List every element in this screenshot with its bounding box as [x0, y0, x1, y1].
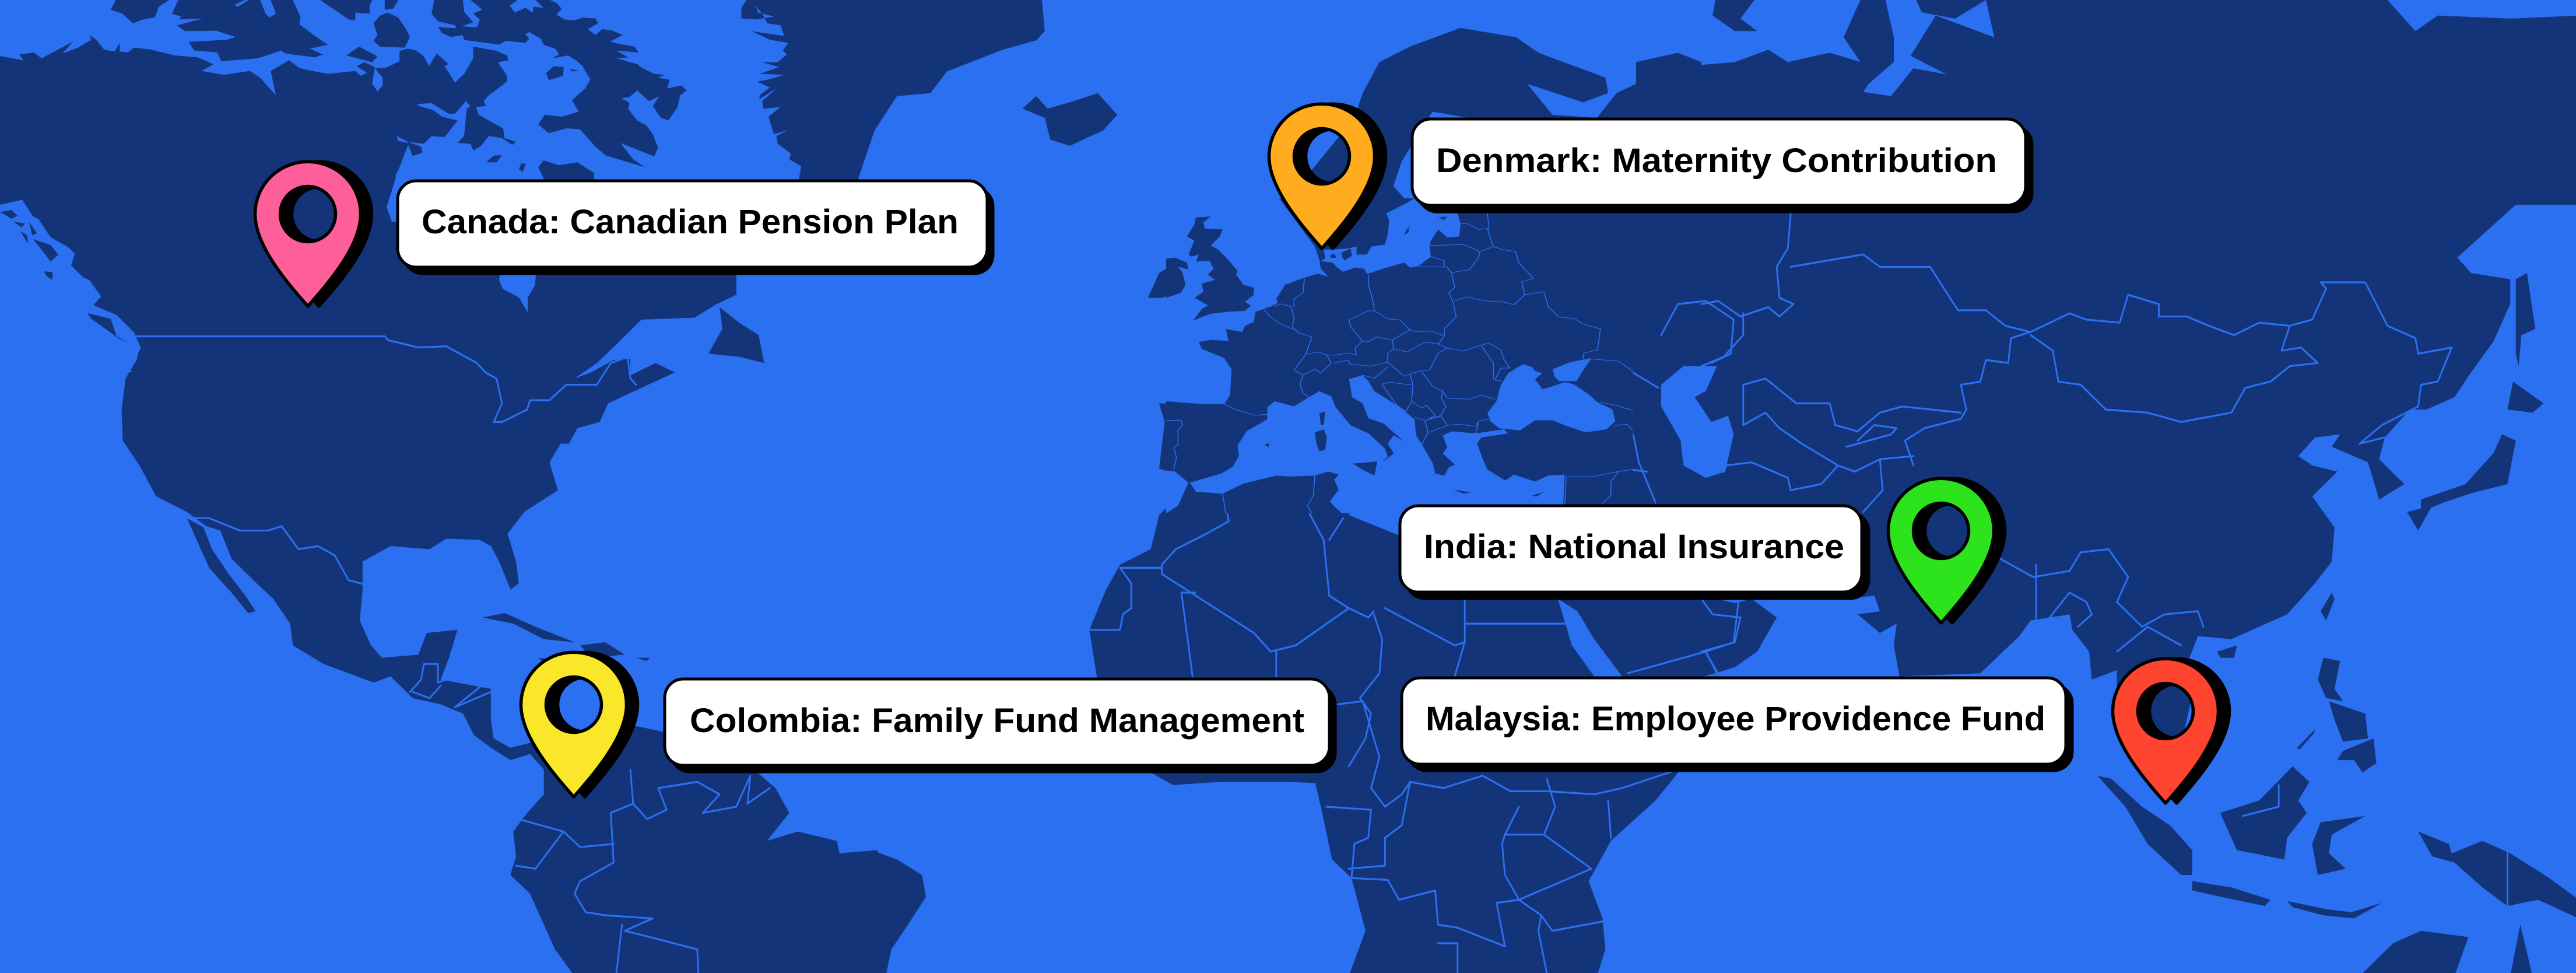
island: Mallorca: [1264, 443, 1269, 447]
land: Greenland, Brazil, Europe and Africa: [816, 0, 1701, 973]
island: Novaya Zemlya: [1712, 0, 1757, 31]
island: Victoria strip: [374, 13, 410, 48]
island: Bylot: [546, 66, 564, 80]
water: Hudson Bay west edge: [396, 159, 408, 181]
water: Mediterranean Sea: [1190, 375, 1565, 513]
island: Luzon: [2318, 658, 2343, 701]
water: Hudson Bay, Foxe Basin and Baffin Bay: [408, 0, 801, 181]
islands: Alexander Archipelago: [0, 210, 128, 342]
water: Atlantic and North Sea: [1166, 198, 1328, 404]
island: Gotland: [1404, 226, 1409, 235]
water: Caspian Sea: [1661, 366, 1733, 478]
pin: India: [1888, 478, 2005, 623]
island: Sumatra: [2097, 776, 2192, 875]
island: Taiwan: [2321, 593, 2335, 621]
water: Arctic channels west: [0, 0, 408, 181]
island: Funen: [1330, 254, 1336, 258]
callout: India: India: National Insurance: [1424, 528, 1844, 566]
island: Sardinia: [1315, 429, 1327, 452]
island: Foxe small: [570, 69, 578, 72]
land: Europe, Africa and Middle East: [1089, 28, 1701, 973]
island: Sakhalin: [2516, 273, 2535, 366]
water: Gulf of Ob: [1863, 0, 1994, 96]
island cluster: Arctic islands over channels: [346, 13, 578, 172]
island: Cuba: [483, 613, 574, 642]
island: Saaremaa: [1438, 216, 1447, 220]
island: Java: [2192, 881, 2270, 906]
island: Coats: [486, 155, 502, 162]
land: Americas: [0, 0, 878, 973]
islands: Europe: [1166, 216, 1544, 496]
island: Hainan: [2217, 645, 2237, 658]
island: Mansel: [519, 163, 526, 172]
callout: India: [1400, 506, 1869, 598]
callout: Colombia: Colombia: Family Fund Management: [690, 702, 1304, 740]
callout: Malaysia: Malaysia: Employee Providence Fund: [1426, 700, 2045, 738]
island: Great Britain: [1187, 216, 1254, 321]
water: Chesterfield inlet: [397, 136, 408, 143]
island: Jamaica: [538, 658, 549, 663]
island: Ireland west: [1148, 257, 1187, 298]
land: Brazil coast: [872, 850, 926, 973]
water: James Bay: [499, 271, 536, 312]
water: Red Sea: [1558, 599, 1622, 677]
water: arctic inlet: [260, 0, 276, 18]
pin: Malaysia: [2113, 659, 2230, 803]
island: Kyushu: [2407, 506, 2432, 531]
island: Corsica: [1319, 411, 1325, 425]
island: New Guinea: [2418, 831, 2576, 918]
island: Visayas: [2329, 701, 2368, 741]
callout: Denmark: Denmark: Maternity Contribution: [1436, 142, 1997, 180]
island: Palawan: [2297, 729, 2315, 750]
land: Asia and Oceania: [1698, 0, 2576, 973]
island: Borneo: [2220, 766, 2310, 859]
national borders: Africa and Middle East: [1089, 301, 1739, 973]
island: Crete: [1453, 489, 1471, 494]
detailed map of Europe: [1166, 198, 1633, 513]
water: Sea of Azov: [1553, 358, 1592, 381]
water: Hudson Bay west shore: [387, 145, 420, 222]
water: Baltic Sea: [1321, 198, 1461, 274]
water: Pacific coast of Alaska and British Columbia: [0, 204, 141, 373]
land: Arabian peninsula: [1698, 594, 1777, 678]
pin: Denmark: [1269, 104, 1385, 249]
island: Ireland: [1166, 258, 1188, 298]
island: Lesser Sunda: [2287, 901, 2382, 918]
island: Honshu: [2421, 435, 2516, 512]
pin: Canada: [255, 162, 372, 306]
national borders: Europe: [1166, 214, 1633, 513]
island: Puerto Rico: [636, 658, 650, 661]
callout: Canada: [398, 181, 993, 274]
island: Mindanao: [2338, 738, 2377, 772]
island: Sicily: [1353, 461, 1377, 475]
island: Baja California: [187, 518, 255, 613]
island: Newfoundland: [708, 307, 764, 363]
national borders: Asia: [1701, 214, 2507, 906]
pin: Colombia: [521, 652, 638, 797]
water: Atlantic off Gibraltar: [1166, 471, 1188, 513]
island: Iceland: [1023, 93, 1117, 146]
island: Hispaniola: [580, 642, 625, 658]
callout: Denmark: [1412, 119, 2032, 212]
water: Caribbean and Red Sea bodies: [1349, 366, 1733, 677]
island: Prince of Wales: [346, 47, 377, 62]
callout: Malaysia: [1402, 678, 2072, 771]
water: channel in Ellesmere: [462, 0, 482, 27]
water: northern fjords: [510, 0, 543, 13]
callout: Canada: Canada: Canadian Pension Plan: [422, 203, 959, 241]
national borders: Americas: [136, 337, 770, 973]
island: Hokkaido: [2507, 382, 2544, 412]
land: Australia: [2360, 931, 2468, 973]
callout: Colombia: [665, 679, 1335, 772]
water: arctic sliver: [234, 0, 248, 7]
water: Black Sea: [1487, 364, 1615, 432]
land: Cape York: [2510, 925, 2532, 973]
island: Sulawesi: [2312, 816, 2365, 875]
island: Cyprus: [1532, 492, 1544, 496]
water: inlet near Melville: [417, 100, 466, 121]
island: Zealand: [1342, 249, 1352, 261]
water: eastern Mediterranean under label: [1349, 471, 1566, 540]
